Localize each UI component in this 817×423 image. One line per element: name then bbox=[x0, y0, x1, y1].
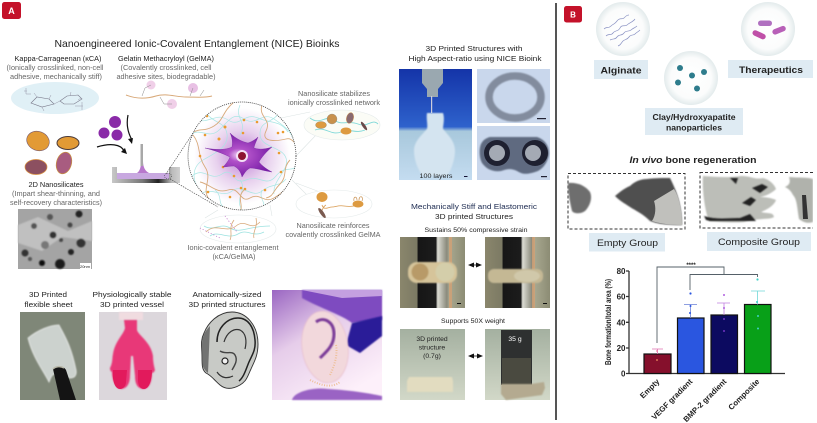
y axis: 20 bbox=[617, 344, 626, 353]
badge A: A bbox=[8, 6, 15, 16]
label: composite group bbox=[707, 232, 811, 251]
text: kappa-carrageenan: adhesive, mechanically stiff) bbox=[10, 72, 102, 81]
caption: high aspect ratio structures: High Aspect-ratio using NICE Bioink bbox=[408, 54, 542, 63]
text: reinforces GelMA bbox=[286, 221, 381, 239]
photo: TEM of nanosilicates: 20nm bbox=[80, 264, 91, 269]
photo: TEM of nanosilicates bbox=[18, 209, 92, 269]
arrow: down into printer bbox=[127, 115, 133, 144]
y axis bbox=[617, 267, 785, 378]
caption: anatomically-sized: Anatomically-sized bbox=[192, 290, 262, 299]
caption: high aspect ratio structures: 3D Printed Structures with bbox=[426, 44, 522, 53]
photo: printed structure 0.7g: 3D printed bbox=[416, 336, 448, 343]
photo: printing 100 layers bbox=[399, 69, 472, 180]
photo: 35 g weight on structure bbox=[485, 329, 550, 400]
arrow: compression double bbox=[468, 262, 482, 268]
bar: empty bbox=[644, 349, 671, 374]
caption: high aspect ratio structures bbox=[408, 44, 542, 63]
icon: alginate bbox=[596, 2, 650, 56]
caption: compressive strain: Sustains 50% compressive strain bbox=[424, 227, 528, 234]
arrow: weight double bbox=[468, 354, 483, 358]
significance bracket: **** bbox=[686, 263, 696, 269]
diagram: printing bath and nozzle bbox=[112, 144, 180, 183]
illustration: ear model bbox=[202, 312, 258, 388]
photo: printed ear held in fingers bbox=[272, 290, 382, 400]
label: therapeutics bbox=[728, 60, 813, 78]
y axis: 40 bbox=[617, 318, 626, 327]
label: alginate: Alginate bbox=[600, 66, 642, 76]
caption: vessel bbox=[92, 290, 172, 309]
y axis: 80 bbox=[617, 267, 626, 276]
text: 2D nanosilicates: 2D Nanosilicates bbox=[28, 180, 84, 189]
caption: vessel: Physiologically stable bbox=[92, 290, 172, 299]
text: gelatin methacryloyl: Gelatin Methacryloyl (GelMA) bbox=[118, 54, 214, 63]
panel B bbox=[564, 2, 817, 423]
photo: printed vessel bbox=[99, 312, 167, 400]
photo: 35 g weight on structure: 35 g bbox=[508, 336, 522, 343]
panel A bbox=[2, 2, 550, 400]
caption: flexible sheet: 3D Printed bbox=[29, 290, 67, 299]
text: gelatin methacryloyl: (Covalently crosslinked, cell bbox=[120, 63, 212, 72]
photo: printing 100 layers: 100 layers bbox=[420, 173, 453, 180]
text: kappa-carrageenan: Kappa-Carrageenan (κCA) bbox=[14, 54, 102, 63]
badge B: B bbox=[570, 10, 576, 20]
inset: ionic-covalent entanglement bbox=[200, 215, 276, 243]
text: reinforces GelMA: covalently crosslinked GelMA bbox=[286, 230, 381, 239]
text: stabilizes network bbox=[288, 89, 380, 107]
text: kappa-carrageenan bbox=[6, 54, 104, 81]
micro-CT: composite group bbox=[700, 170, 817, 230]
y axis: 0 bbox=[621, 370, 626, 378]
title: NICE bioinks: Nanoengineered Ionic-Covalent Entanglement (NICE) Bioinks bbox=[54, 38, 340, 50]
x axis labels: Composite bbox=[727, 377, 762, 412]
inset: reinforced GelMA bbox=[296, 190, 372, 219]
cell body bbox=[205, 133, 272, 177]
zoom lines to circle bbox=[166, 133, 218, 207]
x axis labels bbox=[638, 377, 762, 423]
text: 2D nanosilicates: self-recovery characteristics) bbox=[10, 198, 102, 207]
x axis labels: BMP-2 gradient bbox=[682, 377, 729, 423]
text: stabilizes network: Nanosilicate stabilizes bbox=[298, 89, 370, 98]
photo: flexible sheet bbox=[20, 312, 85, 400]
caption: flexible sheet: flexible sheet bbox=[24, 300, 72, 309]
text: entanglement caption: (κCA/GelMA) bbox=[212, 252, 256, 261]
label: clay/hydroxyapatite nanoparticles: nanoparticles bbox=[666, 124, 723, 132]
photo: compressed structure bbox=[485, 237, 550, 308]
divider between panels bbox=[555, 3, 557, 420]
bar chart: bone formation bbox=[604, 263, 785, 423]
arrow: right into printer bbox=[97, 145, 127, 154]
caption: mechanically stiff: 3D printed Structures bbox=[435, 212, 513, 221]
diagram: magnified cell in network bbox=[188, 102, 300, 213]
caption: mechanically stiff bbox=[411, 202, 537, 221]
icons: 2D nanosilicate discs bbox=[24, 128, 79, 176]
photo: double lumen cross-section bbox=[477, 126, 550, 180]
text: 2D nanosilicates: (Impart shear-thinning, and bbox=[12, 189, 100, 198]
heading: in vivo bone regeneration: In vivo bone regeneration bbox=[630, 155, 757, 166]
diagram: GelMA chain bbox=[126, 80, 212, 109]
label: therapeutics: Therapeutics bbox=[739, 65, 803, 76]
text: 2D nanosilicates bbox=[10, 180, 102, 207]
bar: VEGF gradient bbox=[678, 292, 704, 374]
caption: supports weight: Supports 50X weight bbox=[441, 318, 505, 325]
photo: printed structure 0.7g: (0.7g) bbox=[423, 353, 441, 360]
text: gelatin methacryloyl: adhesive sites, biodegradable) bbox=[116, 72, 216, 81]
significance bracket bbox=[657, 263, 758, 343]
photo: printed structure 0.7g: structure bbox=[419, 344, 445, 352]
text: kappa-carrageenan: (Ionically crosslinked, non-cell bbox=[6, 63, 104, 72]
label: alginate bbox=[594, 60, 648, 79]
caption: anatomically-sized: 3D printed structures bbox=[188, 300, 266, 309]
text: entanglement caption: Ionic-covalent entanglement bbox=[188, 243, 278, 252]
bar: BMP-2 gradient bbox=[711, 294, 738, 374]
bar: composite bbox=[744, 278, 771, 374]
label: clay/hydroxyapatite nanoparticles: Clay/Hydroxyapatite bbox=[652, 113, 736, 122]
caption: mechanically stiff: Mechanically Stiff and Elastomeric bbox=[411, 202, 537, 211]
caption: vessel: 3D printed vessel bbox=[100, 300, 164, 309]
inset: stabilized ionic network bbox=[304, 110, 380, 140]
label: empty group: Empty Group bbox=[597, 238, 658, 248]
x axis labels: VEGF gradient bbox=[650, 377, 695, 422]
y axis: 60 bbox=[617, 292, 626, 302]
photo: uncompressed structure bbox=[400, 237, 465, 308]
caption: flexible sheet bbox=[24, 290, 72, 309]
photo: printed structure 0.7g bbox=[400, 329, 465, 400]
label: composite group: Composite Group bbox=[718, 237, 800, 248]
caption: anatomically-sized bbox=[188, 290, 266, 309]
badge B bbox=[564, 6, 582, 22]
badge A bbox=[2, 2, 21, 19]
diagram: kappa-carrageenan molecule bbox=[11, 82, 99, 114]
photo: ring cross-section bbox=[477, 69, 550, 123]
icon: purple nanoparticles bbox=[98, 116, 122, 140]
micro-CT: empty group bbox=[568, 174, 685, 229]
label: clay/hydroxyapatite nanoparticles bbox=[645, 108, 743, 135]
y axis title: Bone formation/total area (%) bbox=[604, 279, 613, 365]
text: reinforces GelMA: Nanosilicate reinforces bbox=[296, 221, 370, 230]
cell nucleus bbox=[236, 150, 248, 162]
icon: clay nanoparticles bbox=[664, 51, 718, 105]
icon: therapeutics capsules bbox=[741, 2, 795, 56]
text: entanglement caption bbox=[188, 243, 278, 261]
text: gelatin methacryloyl bbox=[116, 54, 216, 81]
x axis labels: Empty bbox=[638, 377, 662, 400]
label: empty group bbox=[589, 233, 665, 252]
text: stabilizes network: ionically crosslinked network bbox=[288, 98, 380, 107]
